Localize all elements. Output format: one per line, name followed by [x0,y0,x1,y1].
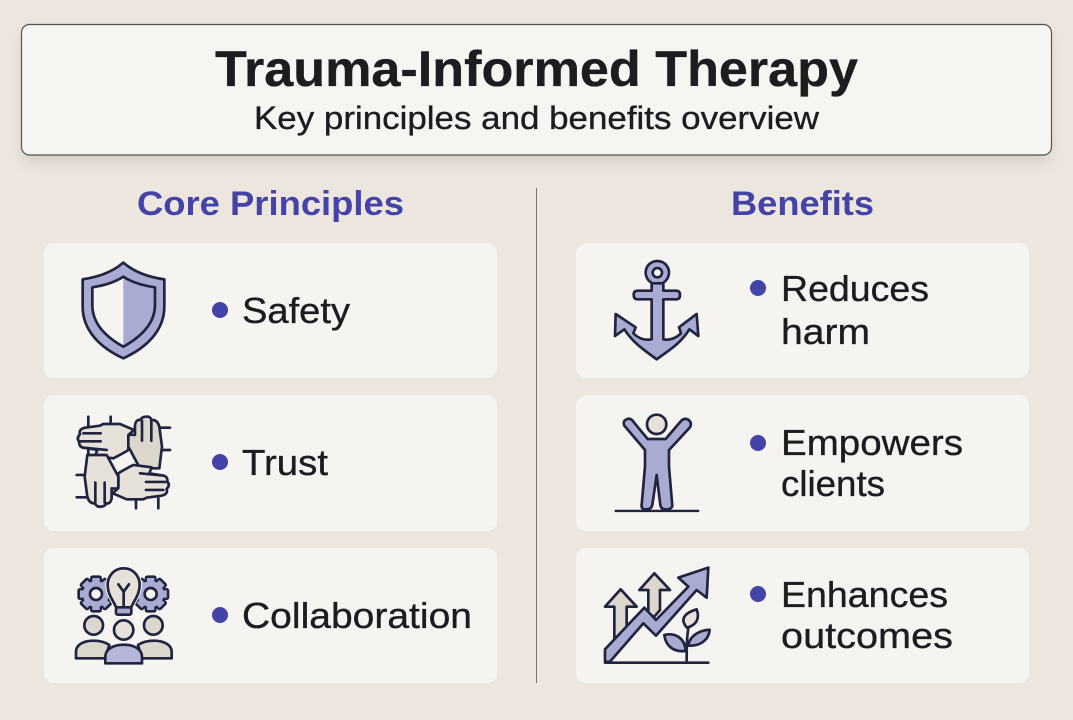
label: trust: Trust [242,442,328,483]
title: Trauma-Informed Therapy [215,41,858,97]
label: empowers clients [781,422,963,504]
label: reduces harm [781,268,929,352]
bullet [212,454,228,470]
panel: empowers clients [576,395,1029,531]
title banner [22,24,1052,162]
label: enhances outcomes: outcomes [781,615,953,656]
icon: team with lightbulb and gears [76,568,172,663]
label: enhances outcomes [781,574,953,656]
center divider [536,188,537,683]
icon: person with raised arms [616,415,698,511]
label: collaboration: Collaboration [242,595,472,636]
bullet [212,607,228,623]
icon: shield [83,263,164,358]
label: empowers clients: Empowers [781,422,963,463]
heading: core principles: Core Principles [137,185,404,223]
panel: collaboration [44,548,497,683]
label: empowers clients: clients [781,463,885,504]
subtitle: Key principles and benefits overview [254,100,820,136]
heading: benefits: Benefits [731,185,874,223]
panel: reduces harm [576,243,1029,378]
label: safety: Safety [242,290,350,331]
bullet [750,586,766,602]
label: enhances outcomes: Enhances [781,574,948,615]
bullet [750,435,766,451]
bullet [750,280,766,296]
bullet [212,302,228,318]
icon: anchor [615,261,698,359]
label: reduces harm: harm [781,311,870,352]
panel: enhances outcomes [576,548,1029,683]
icon: joined hands [77,417,170,508]
label: reduces harm: Reduces [781,268,929,309]
icon: growth arrows and plant [605,568,710,663]
panel: trust [44,395,497,531]
panel: safety [44,243,497,378]
